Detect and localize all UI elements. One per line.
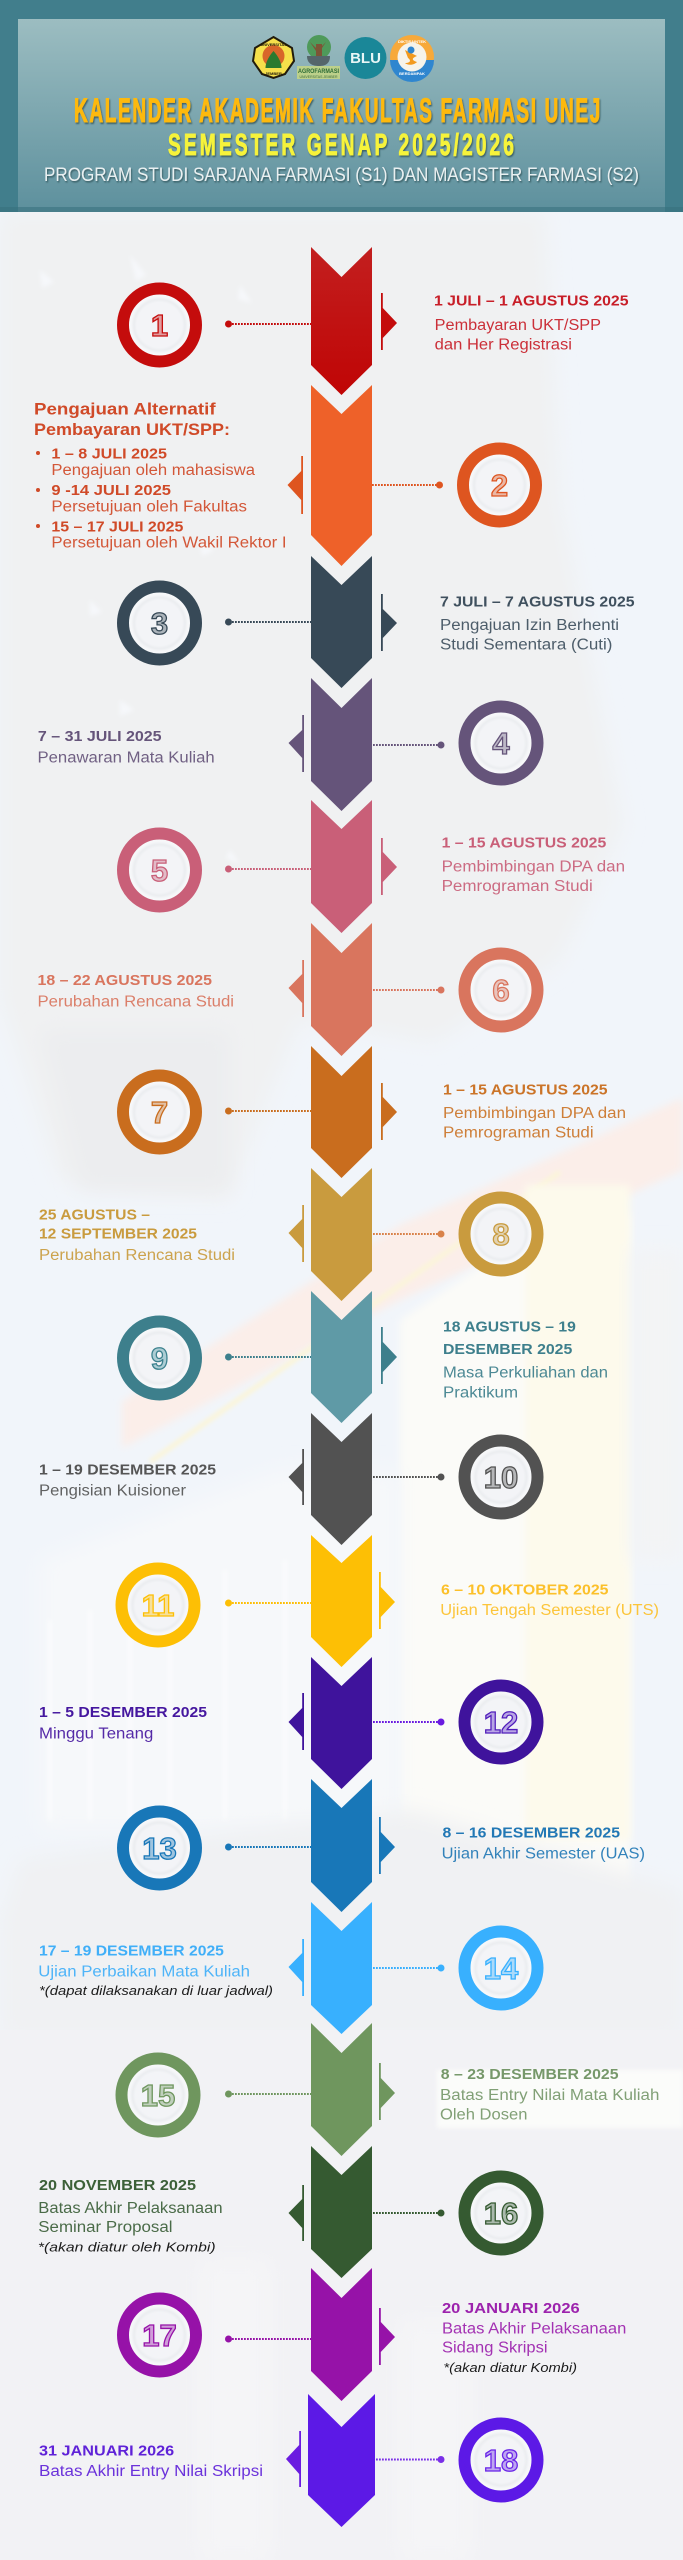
text 2: Pengajuan oleh mahasiswa (51, 462, 255, 479)
text 10 (39, 1461, 216, 1499)
pointer 3 (381, 594, 397, 651)
chevron 18 (308, 2394, 375, 2527)
step 10 (39, 1413, 538, 1545)
text 13: Ujian Akhir Semester (UAS) (442, 1845, 645, 1862)
connector 6 (373, 986, 444, 994)
chevron 1 (311, 247, 372, 395)
step 6 (38, 923, 538, 1056)
text 6: 18 – 22 AGUSTUS 2025 (38, 972, 212, 989)
text 2: Pembayaran UKT/SPP: (34, 421, 230, 439)
step 9 (123, 1291, 608, 1423)
text 11 (440, 1581, 659, 1619)
text 1: Pembayaran UKT/SPP (435, 317, 601, 334)
text 14: 17 – 19 DESEMBER 2025 (39, 1942, 224, 1960)
logo: Diktisaintek Berdampak: BERDAMPAK (399, 71, 425, 76)
step 16 (38, 2146, 538, 2278)
text 15: 8 – 23 DESEMBER 2025 (441, 2066, 618, 2083)
chevron 17 (311, 2268, 372, 2401)
step 3 (123, 556, 635, 688)
chevron 10 (311, 1413, 372, 1545)
step 12 (39, 1657, 538, 1789)
logo: Universitas Jember (253, 37, 294, 78)
pointer 15 (379, 2063, 395, 2120)
pointer 1 (381, 293, 397, 350)
connector 15 (225, 2090, 311, 2098)
step 8 (39, 1168, 538, 1301)
logo: Agrofarmasi: AGROFARMASI (298, 69, 339, 75)
badge 10 (464, 1440, 538, 1514)
chevron 16 (311, 2146, 372, 2278)
pointer 13 (379, 1817, 395, 1874)
text 15: Batas Entry Nilai Mata Kuliah (440, 2087, 659, 2104)
pointer 9 (381, 1327, 397, 1384)
text 18: Batas Akhir Entry Nilai Skripsi (39, 2463, 263, 2480)
connector 13 (225, 1844, 311, 1850)
text 5: Pemrograman Studi (442, 878, 593, 895)
chevron 14 (311, 1902, 372, 2034)
chevron 12 (311, 1657, 372, 1789)
chevron 7 (311, 1046, 372, 1178)
connector 11 (225, 1600, 311, 1606)
step 5 (123, 800, 625, 933)
text 8: 12 SEPTEMBER 2025 (39, 1225, 197, 1242)
step 18 (39, 2394, 538, 2527)
badge 1: 1 (151, 308, 168, 343)
connector 16 (373, 2210, 444, 2216)
badge 5: 5 (151, 853, 168, 888)
text 16: Batas Akhir Pelaksanaan (38, 2200, 223, 2217)
badge 12 (464, 1686, 538, 1758)
pointer 8 (288, 1205, 304, 1262)
text 10: 1 – 19 DESEMBER 2025 (39, 1461, 216, 1478)
badge 13: 13 (142, 1831, 177, 1866)
badge 14 (464, 1932, 538, 2004)
text 17: Sidang Skripsi (442, 2340, 548, 2357)
pointer 4 (288, 715, 304, 772)
text 5: 1 – 15 AGUSTUS 2025 (442, 835, 606, 852)
badge 15 (122, 2058, 194, 2132)
chevron 6 (311, 923, 372, 1056)
text 16: Seminar Proposal (38, 2219, 172, 2236)
chevron 9 (311, 1291, 372, 1423)
text 13 (442, 1824, 645, 1862)
text 16: *(akan diatur oleh Kombi) (38, 2240, 216, 2254)
text 12 (39, 1704, 207, 1742)
connector 8 (373, 1230, 444, 1238)
text 5: Pembimbingan DPA dan (442, 859, 625, 876)
badge 5 (123, 834, 196, 906)
text 3: Studi Sementara (Cuti) (440, 636, 612, 653)
badge 18: 18 (484, 2443, 518, 2478)
pointer 16 (288, 2185, 304, 2241)
badge 2 (463, 448, 536, 522)
badge 7: 7 (151, 1095, 168, 1130)
badge 7 (123, 1076, 196, 1148)
badge 9: 9 (151, 1341, 168, 1376)
text 6 (38, 972, 234, 1011)
badge 3: 3 (151, 606, 168, 641)
connector 18 (376, 2456, 444, 2463)
badge 18 (464, 2424, 538, 2496)
step 13 (123, 1779, 645, 1912)
connector 5 (225, 866, 311, 872)
text 8 (39, 1206, 235, 1264)
badge 4: 4 (492, 726, 510, 761)
step 2 (34, 385, 536, 566)
step 14 (38, 1902, 538, 2034)
text 9: 18 AGUSTUS – 19 (443, 1319, 576, 1336)
text 4 (38, 728, 215, 766)
text 1: dan Her Registrasi (435, 336, 572, 353)
chevron 5 (311, 800, 372, 933)
badge 2: 2 (491, 468, 508, 503)
badge 11 (122, 1568, 194, 1642)
connector 4 (373, 742, 444, 748)
badge 1 (123, 288, 196, 362)
text 14: Ujian Perbaikan Mata Kuliah (38, 1963, 250, 1980)
badge 8 (464, 1198, 538, 1270)
logo: BLU: BLU (350, 50, 381, 67)
logo: Universitas Jember: JEMBER (265, 71, 282, 76)
text 7: Pembimbingan DPA dan (443, 1105, 626, 1122)
chevron 3 (311, 556, 372, 688)
step 1 (123, 247, 628, 395)
text 12: 1 – 5 DESEMBER 2025 (39, 1704, 207, 1721)
badge 17 (123, 2298, 196, 2372)
text 1 (434, 293, 628, 353)
badge 16 (464, 2176, 538, 2250)
text 9 (443, 1319, 608, 1401)
badge 8: 8 (492, 1217, 510, 1252)
pointer 10 (288, 1449, 304, 1505)
header banner (0, 0, 683, 212)
pointer 6 (288, 960, 304, 1017)
connector 2 (372, 482, 443, 488)
text 16 (38, 2177, 223, 2254)
badge 6: 6 (492, 973, 510, 1008)
connector 17 (225, 2336, 311, 2342)
text 2: Pengajuan Alternatif (34, 401, 216, 419)
badge 9 (123, 1322, 196, 1394)
chevron 11 (311, 1535, 372, 1667)
badge 10: 10 (484, 1460, 518, 1495)
text 4: Penawaran Mata Kuliah (38, 749, 215, 766)
text 7: Pemrograman Studi (443, 1124, 594, 1141)
text 6: Perubahan Rencana Studi (38, 994, 234, 1011)
pointer 12 (288, 1693, 304, 1750)
connector 3 (225, 618, 311, 626)
text 9: Praktikum (443, 1384, 518, 1401)
step 17 (123, 2268, 626, 2401)
connector 12 (373, 1718, 444, 1726)
text 17 (442, 2300, 626, 2375)
text 8: Perubahan Rencana Studi (39, 1247, 235, 1264)
logo: Universitas Jember: UNIVERSITAS (260, 42, 287, 47)
pointer 5 (381, 838, 397, 895)
text 15 (440, 2066, 659, 2124)
text 9: Masa Perkuliahan dan (443, 1364, 608, 1381)
badge 3 (123, 586, 196, 660)
text 18 (39, 2442, 263, 2480)
pointer 11 (379, 1572, 395, 1629)
step 15 (122, 2023, 659, 2156)
text 2: Persetujuan oleh Wakil Rektor I (51, 534, 287, 551)
text 17: *(akan diatur Kombi) (443, 2361, 577, 2375)
connector 7 (225, 1108, 311, 1114)
badge 16: 16 (484, 2196, 518, 2231)
connector 14 (373, 1964, 444, 1972)
badge 17: 17 (142, 2318, 177, 2353)
text 2: 9 -14 JULI 2025 (51, 482, 171, 499)
chevron 8 (311, 1168, 372, 1301)
step 4 (38, 678, 538, 811)
text 2: 15 – 17 JULI 2025 (51, 519, 183, 536)
text 4: 7 – 31 JULI 2025 (38, 728, 162, 745)
text 7: 1 – 15 AGUSTUS 2025 (443, 1082, 608, 1099)
text 8: 25 AGUSTUS – (39, 1206, 150, 1223)
logo: Diktisaintek Berdampak (390, 35, 434, 82)
text 9: DESEMBER 2025 (443, 1341, 572, 1358)
logo: Agrofarmasi: UNIVERSITAS JEMBER (300, 75, 338, 79)
text 3: Pengajuan Izin Berhenti (440, 617, 619, 634)
text 7 (443, 1082, 626, 1141)
chevron 2 (311, 385, 372, 566)
badge 15: 15 (141, 2078, 175, 2113)
pointer 7 (381, 1083, 397, 1140)
text 2: 1 – 8 JULI 2025 (51, 445, 167, 462)
badge 4 (464, 706, 538, 780)
text 3 (440, 594, 635, 653)
text 12: Minggu Tenang (39, 1725, 153, 1742)
badge 13 (123, 1812, 196, 1884)
text 2 (34, 401, 287, 551)
text 2: Persetujuan oleh Fakultas (51, 498, 247, 515)
pointer 17 (379, 2308, 395, 2365)
badge 14: 14 (484, 1951, 519, 1986)
badge 12: 12 (484, 1705, 518, 1740)
pointer 2 (288, 456, 303, 514)
text 1: 1 JULI – 1 AGUSTUS 2025 (434, 293, 628, 310)
logo: Agrofarmasi (297, 35, 340, 79)
text 18: 31 JANUARI 2026 (39, 2442, 174, 2460)
pointer 18 (286, 2431, 301, 2487)
connector 9 (225, 1354, 311, 1360)
logo: Diktisaintek Berdampak: DIKTISAINTEK (398, 39, 426, 44)
step 7 (123, 1046, 626, 1178)
chevron 15 (311, 2023, 372, 2156)
connector 1 (225, 320, 311, 328)
text 15: Oleh Dosen (440, 2107, 527, 2124)
text 3: 7 JULI – 7 AGUSTUS 2025 (440, 594, 635, 611)
text 10: Pengisian Kuisioner (39, 1482, 186, 1499)
text 14 (38, 1942, 273, 1998)
chevron 13 (311, 1779, 372, 1912)
text 16: 20 NOVEMBER 2025 (39, 2177, 196, 2194)
logo row (253, 35, 434, 82)
text 17: 20 JANUARI 2026 (442, 2300, 580, 2317)
logo: BLU (344, 37, 386, 79)
text 13: 8 – 16 DESEMBER 2025 (442, 1824, 620, 1841)
step 11 (122, 1535, 659, 1667)
text 11: 6 – 10 OKTOBER 2025 (441, 1581, 608, 1598)
text 5 (442, 835, 625, 895)
text 11: Ujian Tengah Semester (UTS) (440, 1602, 659, 1619)
text 14: *(dapat dilaksanakan di luar jadwal) (39, 1984, 273, 1998)
badge 11: 11 (142, 1588, 174, 1623)
pointer 14 (288, 1939, 304, 1996)
text 17: Batas Akhir Pelaksanaan (442, 2320, 626, 2338)
connector 10 (373, 1474, 444, 1480)
badge 6 (464, 954, 538, 1026)
chevron 4 (311, 678, 372, 811)
